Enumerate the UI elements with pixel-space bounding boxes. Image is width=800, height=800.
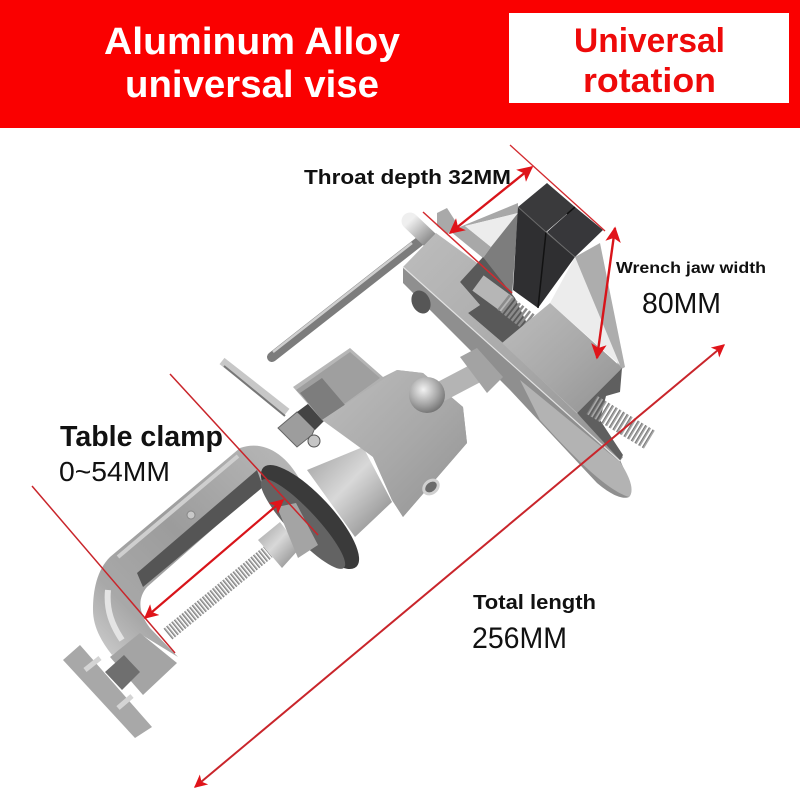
measurement: throat depth: [423, 145, 605, 293]
measurement: total length: [195, 345, 724, 787]
header banner: [0, 0, 800, 128]
label: wrench jaw width: 80MM: [642, 288, 721, 320]
lower hex handle: [222, 361, 345, 447]
moving jaw block: [502, 303, 623, 460]
swivel body: [248, 348, 467, 582]
clamp knob: [63, 645, 152, 738]
label: total length: Total length: [473, 592, 596, 614]
label: table clamp: [59, 421, 223, 487]
black jaw inserts: [513, 183, 603, 308]
ball joint: [409, 348, 503, 413]
title: Aluminum Alloy: [104, 21, 400, 63]
label: total length: 256MM: [472, 622, 567, 655]
label: wrench jaw width: Wrench jaw width: [616, 260, 766, 277]
clamp screw: [168, 503, 318, 634]
measurement: jaw width: [597, 228, 615, 358]
callout: universal rotation: rotation: [583, 62, 716, 100]
label: throat depth: Throat depth 32MM: [304, 167, 511, 189]
vise base rail: [403, 233, 632, 498]
title: universal vise: [125, 64, 379, 106]
label: total length: [472, 592, 596, 655]
rear wedge: [450, 203, 530, 343]
vise product illustration: [63, 183, 650, 738]
front thread: [592, 405, 650, 440]
measurement: table clamp opening: [32, 374, 318, 653]
label: table clamp: 0~54MM: [59, 456, 170, 487]
label: table clamp: Table clamp: [60, 421, 223, 453]
C clamp frame: [93, 446, 300, 695]
label: wrench jaw width: [616, 260, 766, 320]
lead screw: [478, 283, 530, 323]
callout: universal rotation: Universal: [574, 22, 725, 60]
front wedge: [550, 243, 625, 370]
title: [104, 21, 400, 106]
tightening lever upper: [272, 208, 456, 357]
callout: universal rotation: [509, 13, 789, 103]
